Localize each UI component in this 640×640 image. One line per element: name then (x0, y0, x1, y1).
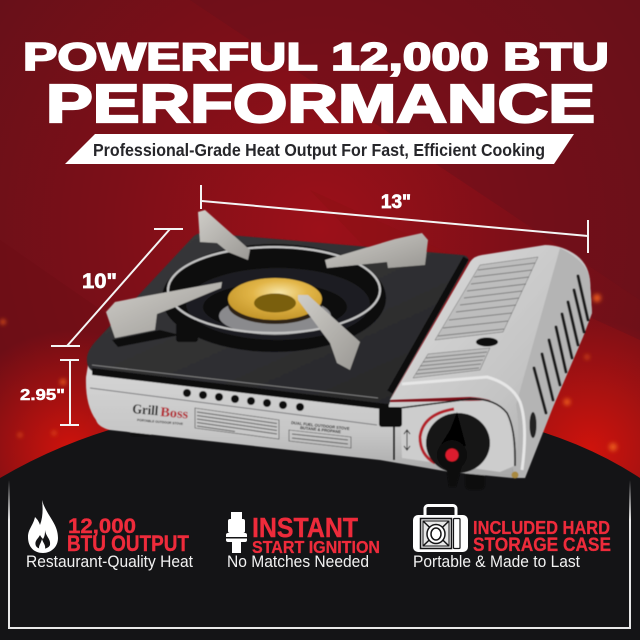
lower warning label (413, 348, 490, 378)
black edge along housing (390, 258, 466, 392)
dimension: width 13 inches (201, 185, 588, 253)
feature: hard storage case (413, 506, 611, 571)
brand logo: Boss (160, 404, 189, 421)
dimension: width 13 inches: 13" (381, 192, 411, 213)
side round hole (530, 412, 536, 438)
dimension: height 2.95 inches (20, 360, 79, 425)
fuel label: BUTANE & PROPANE (300, 425, 341, 434)
front panel groove (90, 388, 377, 425)
title line 2: PERFORMANCE (46, 74, 595, 134)
heading: 12,000 (68, 515, 136, 538)
black top plate (87, 233, 468, 408)
pot support front right (298, 295, 360, 370)
housing rim highlight (402, 377, 525, 470)
heading: INSTANT (252, 512, 358, 543)
burner dark centre (203, 283, 347, 331)
red ignition button (446, 448, 458, 462)
safety label (195, 408, 279, 439)
caption: No Matches Needed (227, 553, 369, 571)
front-left support foot (112, 330, 180, 347)
icon: storage case (413, 506, 468, 552)
caption: Portable & Made to Last (413, 553, 580, 571)
portable stove (86, 210, 592, 490)
housing front edge (400, 399, 515, 466)
housing side shade (514, 248, 592, 478)
knob grip (437, 440, 467, 470)
chrome ring grate (168, 247, 380, 333)
burner metal base (219, 297, 331, 335)
knob tail (446, 466, 462, 487)
fuel label (289, 420, 351, 448)
title (23, 36, 609, 134)
subtitle banner (65, 134, 574, 164)
front knob panel (400, 402, 514, 472)
oval cartridge window (476, 338, 498, 346)
feature: 12,000 BTU output (26, 500, 193, 571)
flame arrow (404, 430, 410, 450)
burner bowl (162, 244, 386, 352)
top warning label (435, 257, 538, 340)
front silver panel (86, 365, 520, 478)
heading: INCLUDED HARD (473, 518, 610, 538)
knob pointer (440, 412, 466, 446)
brand logo: PORTABLE OUTDOOR STOVE (137, 418, 183, 426)
plate edge highlight (92, 365, 378, 398)
icon: igniter (225, 512, 248, 553)
brass screw (512, 472, 518, 478)
lower-left burner bracket (176, 320, 198, 342)
dimension: depth 10 inches (51, 229, 183, 346)
side vent slots (534, 276, 588, 413)
icon: flame (28, 500, 58, 553)
gold burner cap (228, 278, 322, 320)
burner teeth (228, 286, 322, 324)
fuel label: DUAL FUEL OUTDOOR STOVE (291, 420, 350, 431)
pot support front left (106, 282, 222, 338)
front black lip (92, 368, 390, 410)
heading line 2: STORAGE CASE (473, 534, 611, 556)
caption: Restaurant-Quality Heat (26, 553, 193, 571)
embers (0, 294, 617, 451)
title line 1: POWERFUL 12,000 BTU (23, 36, 609, 79)
brand logo: Grill (132, 401, 159, 418)
heading line 2: BTU OUTPUT (67, 531, 189, 556)
burner inner band (186, 268, 370, 340)
front divider (393, 425, 395, 460)
dimension: depth 10 inches: 10" (82, 270, 117, 293)
dark lower panel (0, 410, 640, 640)
pot support back right (325, 233, 428, 268)
right side housing (390, 245, 592, 478)
stove feet (130, 428, 485, 490)
subtitle banner: Professional-Grade Heat Output For Fast, Efficient Cooking (93, 140, 545, 160)
bottom white frame (8, 480, 631, 628)
pot support back left (198, 210, 250, 260)
dimension: height 2.95 inches: 2.95" (20, 387, 65, 404)
black knob (426, 413, 490, 473)
brand logo (132, 401, 189, 426)
feature: instant start ignition (225, 512, 380, 571)
latch (379, 407, 402, 427)
red dial ring (420, 409, 454, 463)
heading line 2: START IGNITION (252, 537, 380, 557)
ventilation holes (183, 389, 304, 411)
burner centre hole (254, 294, 296, 312)
